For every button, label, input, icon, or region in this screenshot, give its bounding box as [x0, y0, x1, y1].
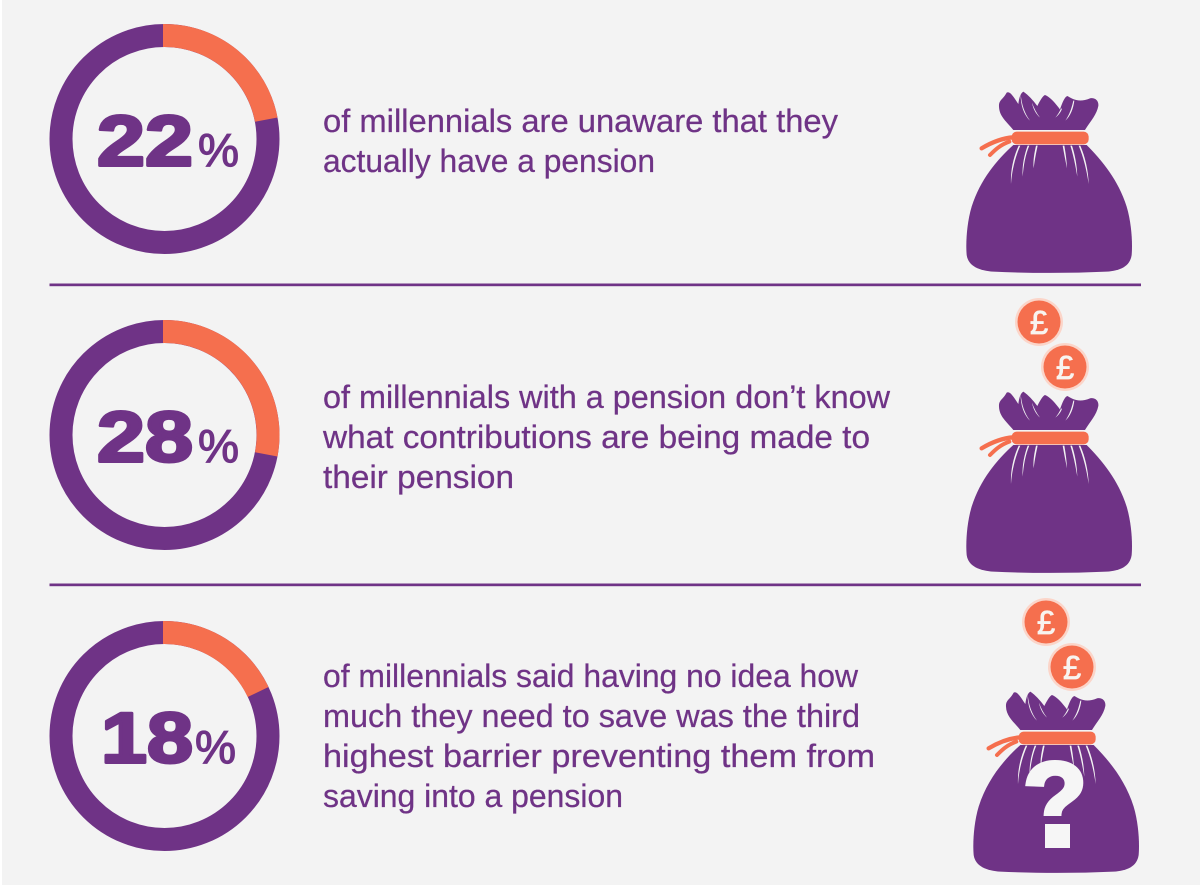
text: unaware of pension: actually have a pension — [323, 143, 655, 179]
text: contributions unknown: what contributions are being made to — [322, 419, 870, 455]
text: savings barrier: of millennials said having no idea how — [323, 658, 859, 694]
donut chart: 28%: 28 — [97, 398, 193, 478]
donut chart: 22%: % — [198, 124, 239, 176]
text: unaware of pension — [323, 103, 838, 179]
panel: 28 percent contributions — [61, 298, 1132, 573]
donut chart: 18% — [61, 621, 268, 840]
panel: 22 percent unaware — [61, 24, 1132, 273]
text: unaware of pension: of millennials are unaware that they — [323, 103, 838, 139]
icon: pound coin — [1022, 598, 1070, 646]
icon: pound coin — [1041, 343, 1089, 391]
icon: question mark: ? — [1023, 741, 1087, 859]
donut chart: 18%: % — [195, 721, 236, 773]
divider — [50, 584, 1141, 586]
donut chart: 22% — [61, 24, 278, 242]
icon: pound coin: £ — [1056, 349, 1074, 386]
icon: pound coin — [1015, 298, 1063, 346]
icon: money bag — [966, 92, 1132, 273]
donut chart: 28%: % — [198, 420, 239, 472]
icon: pound coin: £ — [1063, 649, 1081, 686]
icon: pound coin: £ — [1030, 304, 1048, 341]
divider — [50, 284, 1141, 286]
text: contributions unknown — [322, 379, 891, 495]
text: savings barrier — [323, 658, 875, 814]
donut chart: 22%: 22 — [97, 102, 193, 182]
text: contributions unknown: of millennials with a pension don’t know — [323, 379, 891, 415]
text: savings barrier: much they need to save was the third — [323, 698, 860, 734]
icon: question mark — [1025, 760, 1084, 848]
text: savings barrier: highest barrier preventing them from — [323, 738, 875, 774]
panel: 18 percent barrier — [61, 598, 1139, 873]
donut chart: 28% — [61, 320, 280, 538]
icon: pound coin — [1048, 643, 1096, 691]
icon: pound coin: £ — [1037, 604, 1055, 641]
text: contributions unknown: their pension — [323, 459, 514, 495]
donut chart: 18%: 18 — [101, 700, 193, 778]
text: savings barrier: saving into a pension — [323, 778, 623, 814]
icon: money bag with falling coins — [966, 298, 1132, 573]
icon: money bag with question mark and coins — [973, 598, 1139, 873]
